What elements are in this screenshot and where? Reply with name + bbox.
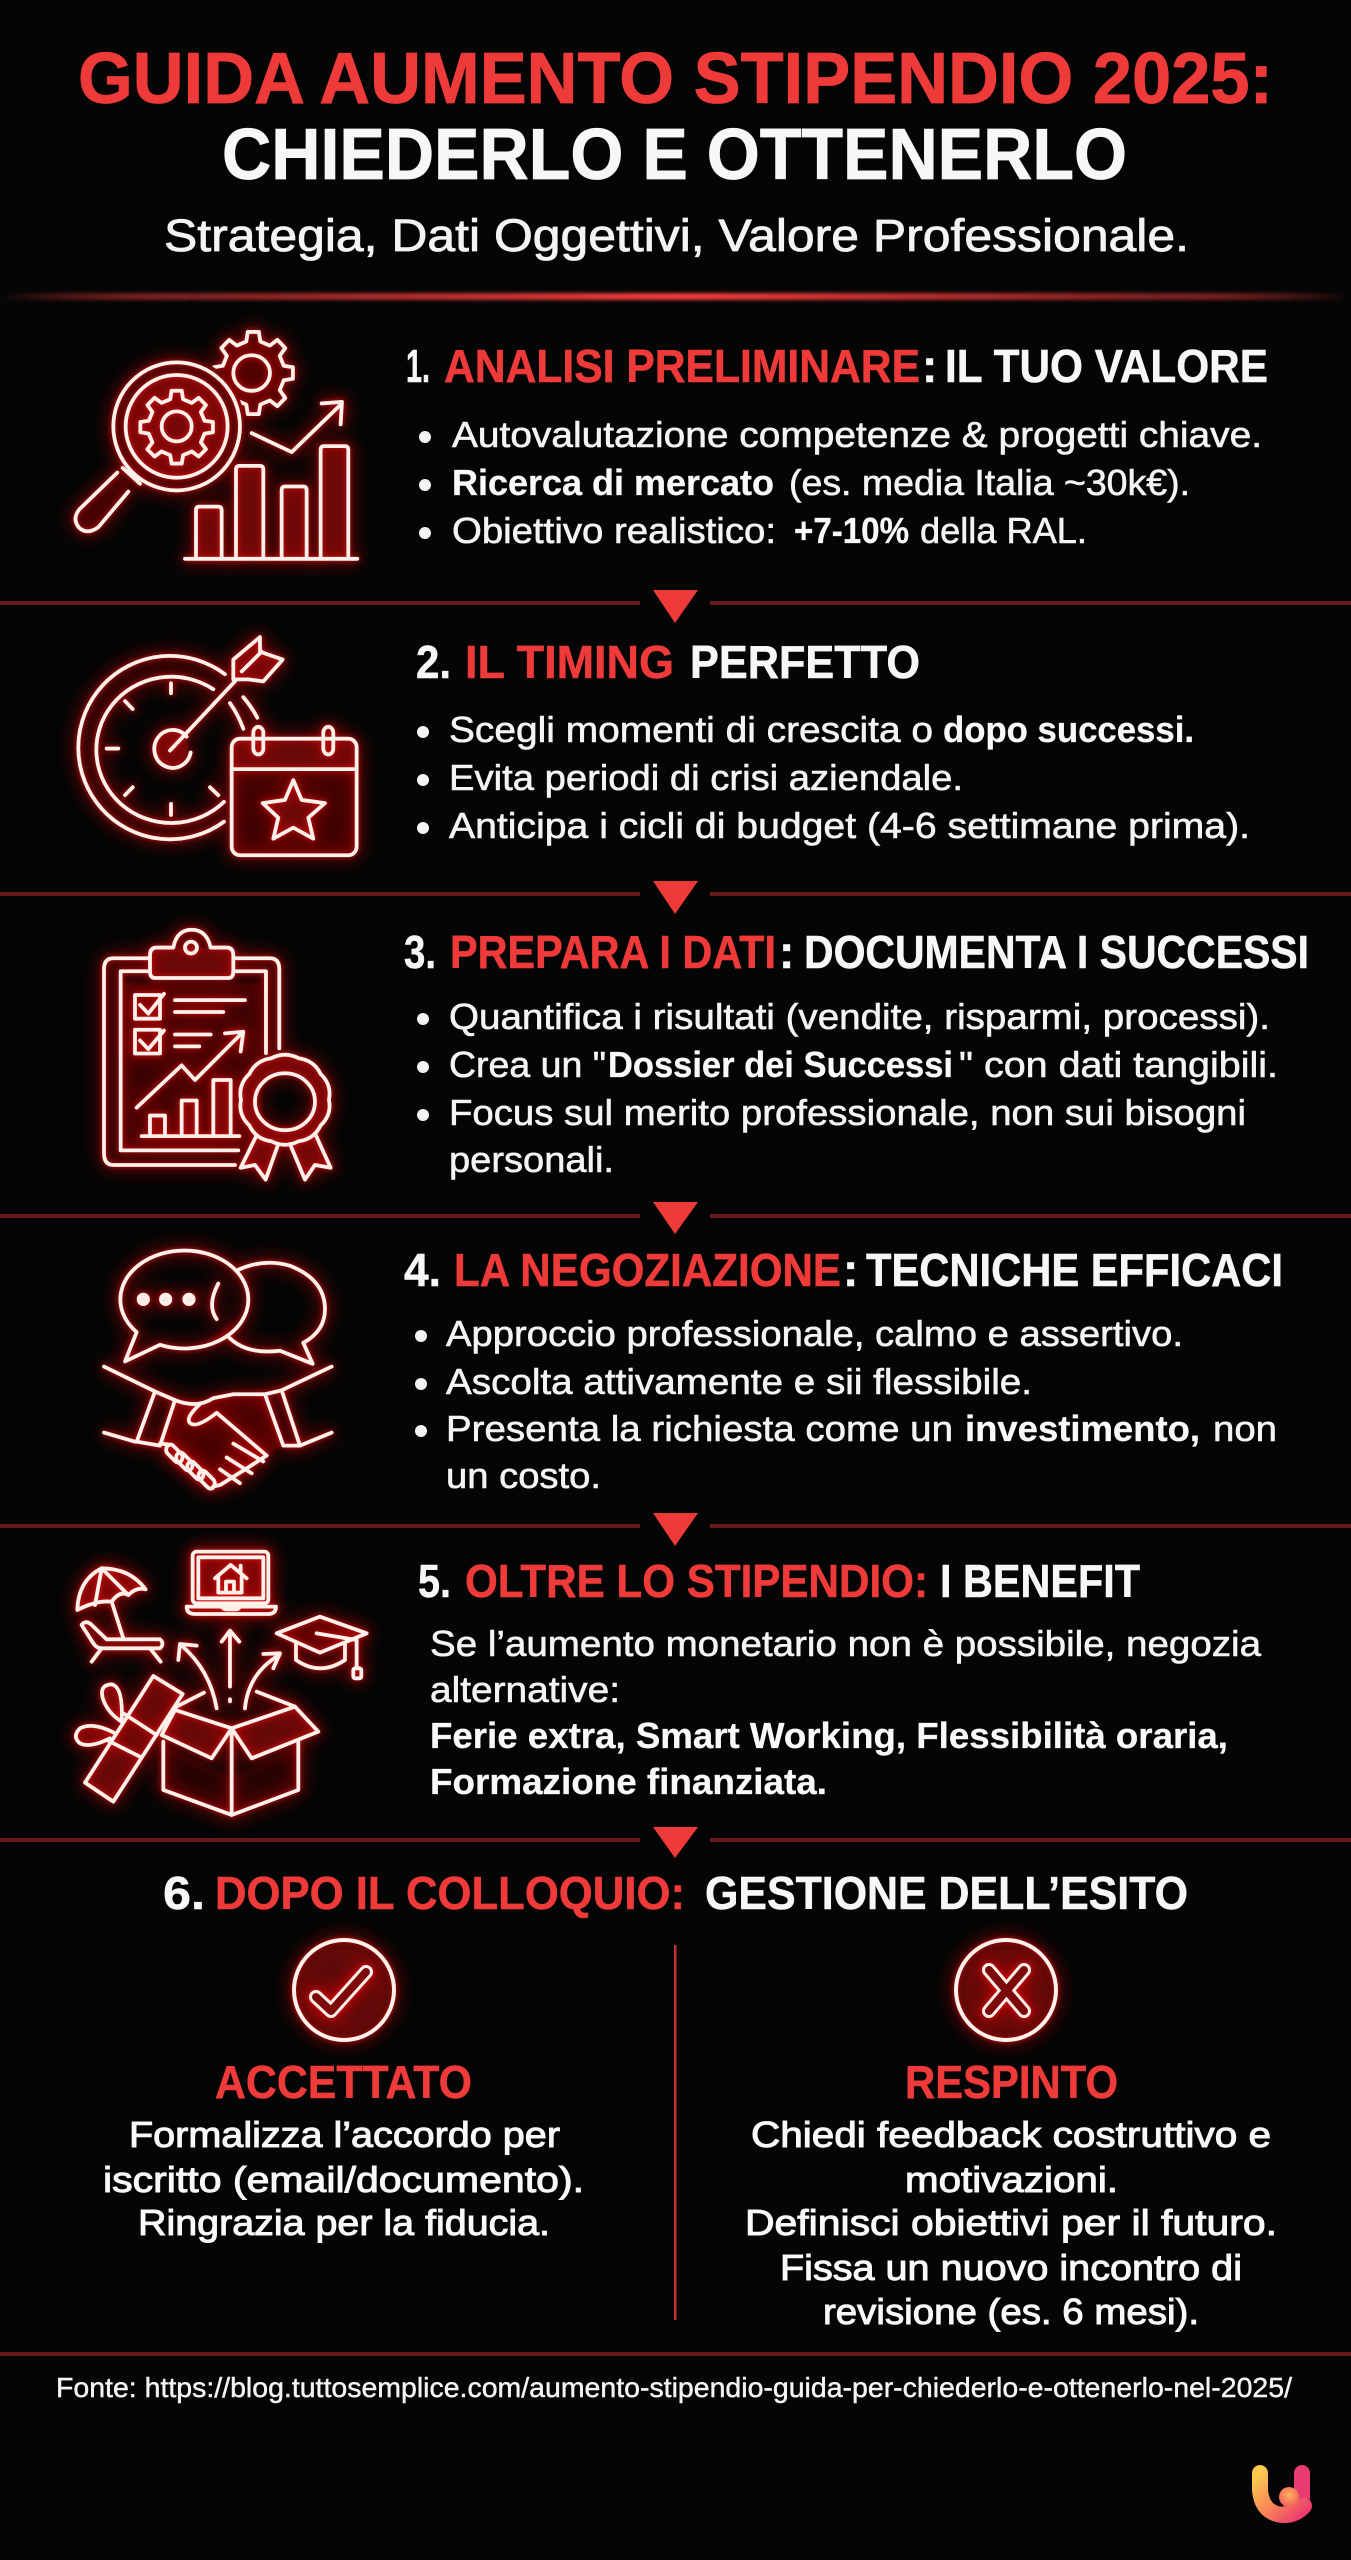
- heading 1: IL TUO VALORE: [945, 340, 1268, 392]
- heading 3: [404, 926, 1309, 978]
- column: accettato: [103, 2056, 584, 2243]
- column: respinto: revisione (es. 6 mesi).: [823, 2291, 1199, 2332]
- heading 3: PREPARA I DATI: [450, 926, 776, 978]
- text block 5: Formazione finanziata.: [430, 1761, 827, 1802]
- source line: Fonte: https://blog.tuttosemplice.com/aumento-stipendio-guida-per-chiederlo-e-ottenerlo-nel-2025/: [56, 2372, 1292, 2403]
- subtitle: Strategia, Dati Oggettivi, Valore Professionale.: [164, 210, 1189, 261]
- heading 1: [406, 340, 1268, 392]
- bullet list 3: Quantifica i risultati (vendite, risparmi, processi).: [449, 996, 1270, 1037]
- panel: 4 la negoziazione: [104, 1244, 1283, 1496]
- title line 1: GUIDA AUMENTO STIPENDIO 2025:: [78, 39, 1273, 119]
- arrow 5: [653, 1827, 698, 1858]
- bullet list 1: [419, 414, 1262, 551]
- heading 5: OLTRE LO STIPENDIO:: [465, 1555, 928, 1607]
- column: respinto: Definisci obiettivi per il futuro.: [745, 2202, 1277, 2243]
- bullet list 3: " con dati tangibili.: [959, 1044, 1278, 1085]
- icon: clipboard with chart and award: [104, 930, 331, 1180]
- bullet list 2: Evita periodi di crisi aziendale.: [449, 757, 963, 798]
- heading 5: I BENEFIT: [940, 1555, 1140, 1607]
- bullet list 4: investimento,: [965, 1408, 1200, 1449]
- bullet list 3: Crea un ": [449, 1044, 606, 1085]
- heading 2: [416, 636, 920, 688]
- heading 1: :: [922, 340, 937, 392]
- bullet list 4: Presenta la richiesta come un: [446, 1408, 953, 1449]
- column: respinto: Fissa un nuovo incontro di: [780, 2247, 1242, 2288]
- heading 6: DOPO IL COLLOQUIO:: [215, 1867, 685, 1919]
- icon: gift box with benefits: [76, 1552, 367, 1815]
- column: accettato: Formalizza l’accordo per: [129, 2114, 560, 2155]
- panel: 6 dopo il colloquio: [103, 1867, 1277, 2332]
- arrow 4: [653, 1513, 698, 1546]
- bullet list 2: dopo successi.: [943, 709, 1194, 750]
- bullet list 4: [415, 1313, 1277, 1496]
- panel: 5 oltre lo stipendio: [76, 1552, 1262, 1815]
- icon: speech bubbles and handshake: [104, 1250, 332, 1491]
- text block 5: Ferie extra, Smart Working, Flessibilità oraria,: [430, 1715, 1228, 1756]
- bullet list 1: Obiettivo realistico:: [452, 510, 776, 551]
- panel: 1 analisi preliminare: [75, 332, 1268, 559]
- column: respinto: Chiedi feedback costruttivo e: [751, 2114, 1271, 2155]
- bullet list 1: della RAL.: [920, 510, 1087, 551]
- text block 5: alternative:: [430, 1669, 620, 1710]
- header: [78, 39, 1273, 261]
- column: accettato: iscritto (email/documento).: [103, 2159, 584, 2200]
- heading 2: 2.: [416, 636, 451, 688]
- bullet list 3: Dossier dei Successi: [608, 1044, 953, 1085]
- heading 4: :: [843, 1244, 858, 1296]
- bullet list 1: +7-10%: [794, 510, 909, 551]
- heading 3: :: [779, 926, 794, 978]
- icon: target clock and calendar: [78, 637, 357, 855]
- bullet list 2: Anticipa i cicli di budget (4-6 settimane prima).: [449, 805, 1250, 846]
- bullet list 1: Ricerca di mercato: [452, 462, 774, 503]
- heading 4: TECNICHE EFFICACI: [866, 1244, 1283, 1296]
- title line 2: CHIEDERLO E OTTENERLO: [222, 115, 1127, 195]
- arrow 2: [653, 881, 698, 914]
- vertical divider: [674, 1945, 676, 2320]
- bullet list 1: (es. media Italia ~30k€).: [789, 462, 1190, 503]
- heading 3: 3.: [404, 926, 436, 978]
- icon: cross circle: [956, 1940, 1056, 2040]
- bullet list 1: Autovalutazione competenze & progetti chiave.: [452, 414, 1262, 455]
- bullet list 2: [417, 709, 1250, 846]
- heading 5: 5.: [418, 1555, 451, 1607]
- bullet list 3: personali.: [449, 1139, 614, 1180]
- heading 1: 1.: [406, 340, 430, 392]
- column: respinto: [745, 2056, 1277, 2332]
- heading 4: LA NEGOZIAZIONE: [454, 1244, 841, 1296]
- bullet list 4: Ascolta attivamente e sii flessibile.: [446, 1361, 1032, 1402]
- column: accettato: ACCETTATO: [215, 2056, 472, 2108]
- logo: [1260, 2473, 1304, 2515]
- arrow 1: [653, 590, 698, 623]
- heading 6: GESTIONE DELL’ESITO: [705, 1867, 1188, 1919]
- arrow 3: [653, 1202, 698, 1234]
- column: respinto: motivazioni.: [905, 2159, 1118, 2200]
- bullet list 3: Focus sul merito professionale, non sui bisogni: [449, 1092, 1246, 1133]
- heading 6: [163, 1867, 1188, 1919]
- icon: check circle: [294, 1940, 394, 2040]
- heading 6: 6.: [163, 1867, 205, 1919]
- heading 1: ANALISI PRELIMINARE: [444, 340, 920, 392]
- column: respinto: RESPINTO: [905, 2056, 1118, 2108]
- text block 5: Se l’aumento monetario non è possibile, negozia: [430, 1623, 1262, 1664]
- bullet list 4: un costo.: [446, 1455, 601, 1496]
- heading 4: [404, 1244, 1283, 1296]
- bullet list 4: Approccio professionale, calmo e assertivo.: [446, 1313, 1183, 1354]
- heading 2: IL TIMING: [465, 636, 674, 688]
- heading 5: [418, 1555, 1140, 1607]
- bullet list 3: [417, 996, 1278, 1180]
- bullet list 4: non: [1213, 1408, 1277, 1449]
- column: accettato: Ringrazia per la fiducia.: [138, 2202, 550, 2243]
- icon: magnifier, gears and growth chart: [75, 332, 357, 559]
- panel: 2 il timing: [78, 636, 1250, 855]
- panel: 3 prepara i dati: [104, 926, 1309, 1180]
- bullet list 2: Scegli momenti di crescita o: [449, 709, 933, 750]
- heading 2: PERFETTO: [690, 636, 920, 688]
- heading 4: 4.: [404, 1244, 441, 1296]
- text block 5: [430, 1623, 1262, 1802]
